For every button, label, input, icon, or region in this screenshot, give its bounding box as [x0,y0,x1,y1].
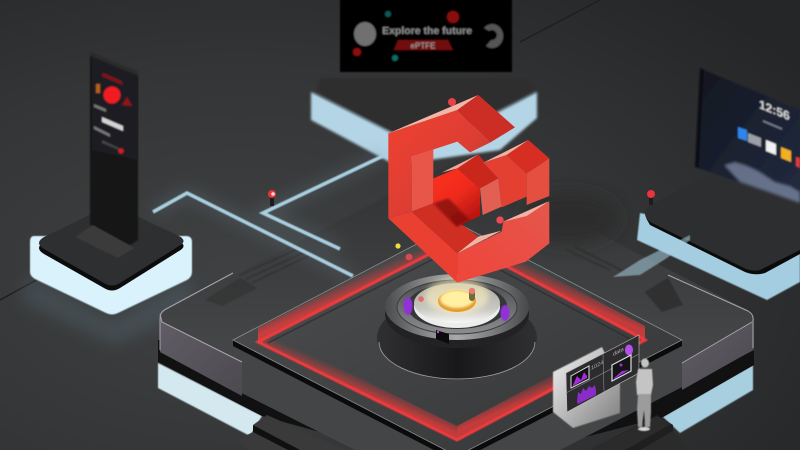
yellow centre [438,290,476,312]
glass side right [682,316,753,390]
logo left wall [388,110,490,218]
pink spark [406,254,412,260]
monitor clock: 12:56 [759,97,790,123]
kiosk foot plate [75,225,135,258]
board white body [553,347,620,428]
logo lower inner [412,203,478,253]
right monitor [695,68,800,203]
steps bottom right [590,415,690,450]
stand light band [311,92,537,165]
stand dark side [646,218,800,274]
top display stand [311,78,537,165]
board chart three [612,355,631,381]
glass edge left [160,273,242,362]
steps bottom left [237,415,345,450]
main platform [158,160,754,450]
lower light band left [158,363,262,436]
board pie [625,344,633,356]
stand light band [637,213,800,300]
logo cube one [433,154,502,227]
logo top dot [448,98,456,106]
right beacon [647,190,655,205]
stand dark side [39,211,184,290]
cube shadow [433,198,470,227]
inner disc [414,286,500,328]
red glow square [258,226,645,440]
person [636,358,653,431]
glass edge right [668,275,753,363]
logo lower strips [457,201,549,253]
kiosk small icons [96,84,132,106]
logo top strip [388,95,478,133]
dark band [158,340,754,450]
left kiosk stand [20,206,192,345]
logo arm face [457,95,515,143]
surface slots right [567,247,683,312]
right display stand [637,140,800,300]
kiosk red circle [104,86,120,104]
stand dark cap [316,78,536,150]
screen heading: Explore the future [382,25,472,37]
board chart two [577,385,596,404]
pin [469,288,475,301]
top display screen [340,0,512,72]
logo shadow on platform [522,192,618,244]
board chart one [571,366,589,388]
yellow spark [395,243,401,249]
monitor date [763,120,782,130]
surface slots left [205,248,310,306]
screen dots [353,11,459,61]
monitor mountains [724,162,800,203]
left kiosk screen [90,52,138,247]
stand floor glow [20,275,192,345]
stand light band [30,236,192,314]
device glow [425,278,489,314]
stand cap [39,206,184,286]
device ring [385,280,529,348]
logo inner wall [412,149,433,212]
lower light band right [663,365,753,433]
info board [553,335,639,428]
board text one: 1024 [591,360,604,372]
left beacon [268,190,276,206]
logo cube two [483,140,549,207]
board text two: data [613,346,624,358]
control box [436,330,449,344]
kiosk title text [102,73,123,85]
logo lower dot [496,216,504,224]
screen icons [354,22,503,48]
red logo [388,95,549,283]
kiosk text rows [94,104,124,154]
device base [377,296,537,380]
monitor app icons [738,127,800,168]
platform top [159,160,754,450]
purple well [404,297,510,321]
pink dot [418,296,424,302]
central lifter device [377,274,537,380]
board screen [566,335,639,412]
floor light lines [153,155,385,276]
glass side left [160,315,242,396]
screen red banner [394,40,453,50]
logo lower right [457,202,549,283]
inner plate [233,223,682,450]
stand dark cap [645,140,800,271]
screen red banner: ePTFE [411,42,435,50]
logo lower left [388,212,457,283]
translucent beam [613,235,690,277]
